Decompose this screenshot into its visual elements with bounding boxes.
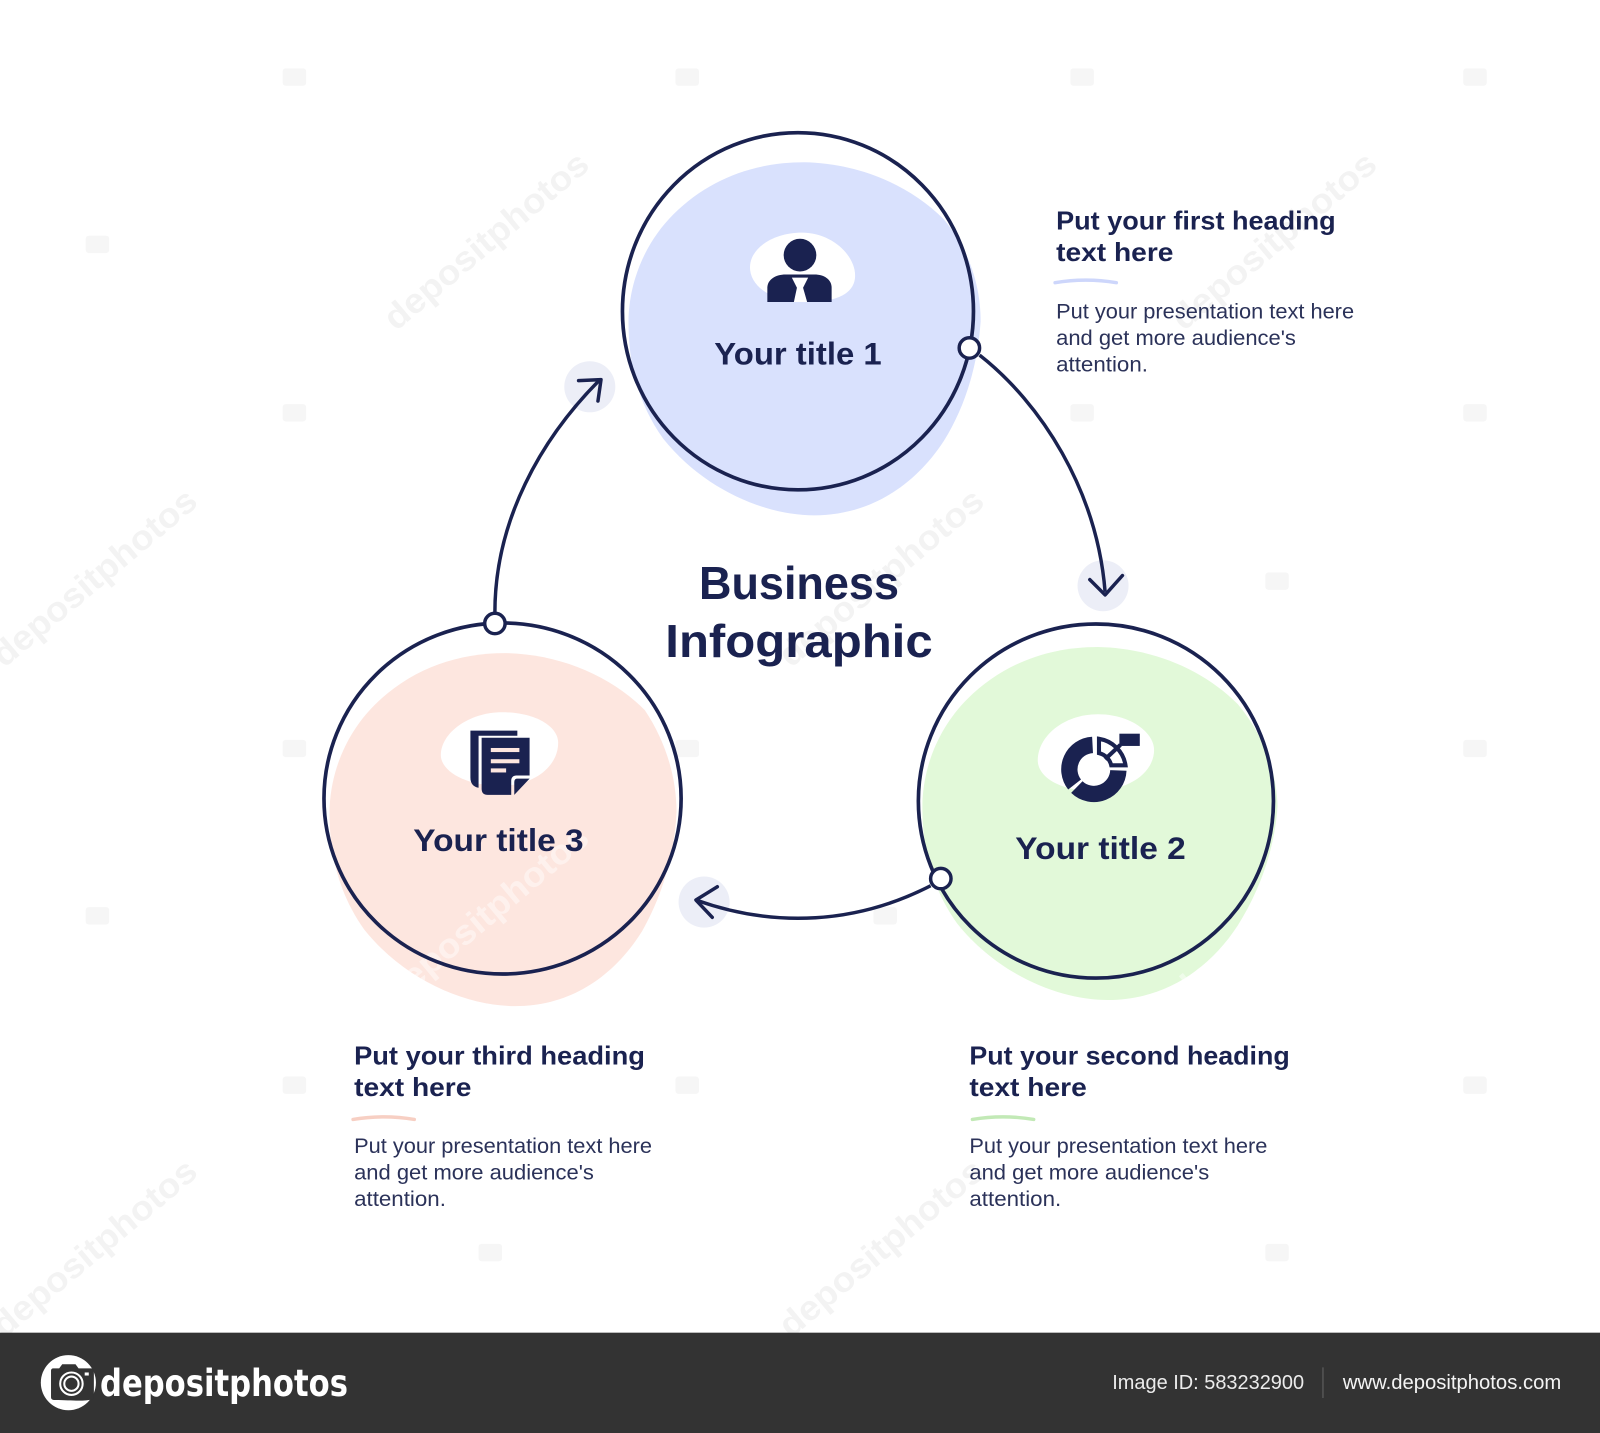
text block: second heading: text here xyxy=(969,1074,1087,1102)
website: www.depositphotos.com xyxy=(1342,1372,1561,1394)
label: your title 3: Your title 3 xyxy=(413,822,584,858)
text block: first heading xyxy=(1055,208,1354,376)
title: business infographic xyxy=(665,557,933,667)
text block: third heading: text here xyxy=(354,1074,471,1102)
arrow: step 2 to step 3 xyxy=(679,868,951,928)
text block: first heading: text here xyxy=(1056,239,1173,267)
wordmark: depositphotos xyxy=(100,1361,348,1405)
label: your title 2: Your title 2 xyxy=(1015,830,1186,866)
panel: step 1 circle xyxy=(622,133,981,515)
text block: first heading: and get more audience's xyxy=(1056,326,1296,350)
arrow: step 1 to step 2 xyxy=(959,338,1129,611)
icon: businessman xyxy=(750,233,855,302)
text block: second heading: Put your second heading xyxy=(969,1042,1290,1070)
label: your title 1: Your title 1 xyxy=(714,335,882,371)
arrow: step 3 to step 1 xyxy=(485,361,615,634)
text block: third heading xyxy=(353,1042,652,1211)
text block: first heading: attention. xyxy=(1056,352,1148,376)
icon: camera logo xyxy=(41,1355,96,1410)
ring: step 2 outline xyxy=(918,624,1273,978)
ring: step 1 outline xyxy=(622,133,973,490)
text block: third heading: attention. xyxy=(354,1187,446,1211)
watermark pattern: depositphotos xyxy=(772,481,991,675)
icon: donut chart xyxy=(1038,714,1154,794)
watermark pattern: depositphotos xyxy=(772,1152,991,1345)
watermark on peach blob: depositphotos xyxy=(377,818,596,1011)
blob: peach background xyxy=(330,653,677,1006)
text block: third heading: and get more audience's xyxy=(354,1161,594,1185)
watermark pattern: depositphotos xyxy=(377,145,596,338)
text block: third heading: Put your third heading xyxy=(354,1042,645,1070)
icon: documents xyxy=(441,712,558,795)
text block: first heading: Put your first heading xyxy=(1056,208,1336,236)
text block: second heading: attention. xyxy=(969,1187,1061,1211)
text block: second heading: Put your presentation text here xyxy=(969,1134,1267,1158)
text block: second heading xyxy=(969,1042,1290,1211)
panel: step 3 circle xyxy=(324,623,681,1011)
title: business infographic: Infographic xyxy=(665,615,933,667)
ring: step 3 outline xyxy=(324,623,681,974)
panel: step 2 circle xyxy=(918,624,1384,1011)
watermark on green blob: depositphotos xyxy=(1164,818,1384,1011)
blob: green background xyxy=(922,647,1278,1000)
text block: second heading: and get more audience's xyxy=(969,1161,1209,1185)
text block: first heading: Put your presentation text here xyxy=(1056,299,1354,323)
title: business infographic: Business xyxy=(699,557,899,609)
blob: blue background xyxy=(629,162,981,515)
image id: Image ID: 583232900 xyxy=(1112,1372,1304,1394)
footer bar xyxy=(0,1333,1600,1433)
watermark pattern: depositphotos xyxy=(1164,145,1384,338)
text block: third heading: Put your presentation text here xyxy=(354,1134,652,1158)
